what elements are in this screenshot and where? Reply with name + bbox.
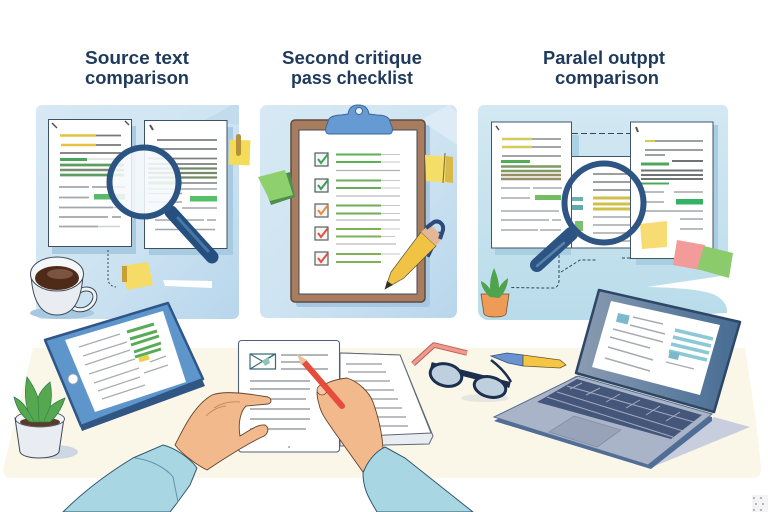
check item 3 <box>315 204 400 220</box>
document: left output <box>492 122 572 248</box>
pink straw <box>413 345 467 364</box>
main reviewed paper <box>238 340 340 452</box>
title: Parallel output comparison: Paralel outppt <box>543 48 665 68</box>
stack of papers <box>340 353 433 446</box>
document: right source <box>144 120 227 248</box>
potted plant: desk <box>14 377 78 459</box>
checklist paper <box>299 130 417 294</box>
panel: second critique checklist <box>258 105 457 318</box>
panel: parallel output comparison <box>478 105 733 320</box>
keyboard <box>537 379 702 439</box>
blank label strip <box>163 280 212 288</box>
clipboard board <box>291 120 425 302</box>
check item 5 <box>315 252 400 265</box>
glasses <box>428 360 511 402</box>
trackpad <box>549 416 621 447</box>
title: Second critique pass checklist <box>282 48 422 88</box>
check item 4 <box>315 227 400 244</box>
pink sticky note <box>673 240 705 270</box>
title: Source text comparison: comparison <box>85 68 189 88</box>
document: middle <box>571 156 632 248</box>
tablet <box>45 303 205 431</box>
title: Second critique pass checklist: pass checklist <box>291 68 413 88</box>
title: Parallel output comparison <box>543 48 665 88</box>
yellow sticky note <box>425 153 453 183</box>
laptop base <box>494 376 712 469</box>
corner noise mark <box>752 495 768 512</box>
dashed connector: top <box>572 132 630 134</box>
coffee cup <box>30 257 95 319</box>
laptop screen <box>576 290 740 412</box>
magnifier: right panel <box>537 164 644 266</box>
panel: source text comparison <box>30 105 250 319</box>
potted plant: panel <box>481 268 509 317</box>
laptop <box>494 290 750 469</box>
sticky note: right edge <box>229 134 250 165</box>
desk surface <box>3 348 761 478</box>
title: Parallel output comparison: comparison <box>555 68 659 88</box>
document: left source <box>48 120 132 246</box>
right hand and arm <box>317 378 473 512</box>
magnifier: left panel <box>110 148 212 257</box>
check item 2 <box>315 179 400 196</box>
green sticky note <box>258 170 295 205</box>
document: right output <box>630 122 713 258</box>
pen <box>385 221 443 289</box>
title: Source text comparison <box>85 48 189 88</box>
check item 1 <box>315 153 400 170</box>
title: Source text comparison: Source text <box>85 48 189 68</box>
red pencil <box>297 354 342 406</box>
marker pen <box>491 353 566 368</box>
clipboard clip <box>326 105 392 134</box>
left hand and arm <box>63 393 271 512</box>
dashed connector <box>108 250 116 287</box>
dashed connector: lower <box>510 255 630 288</box>
title: Second critique pass checklist: Second critique <box>282 48 422 68</box>
yellow sticky note <box>640 221 667 249</box>
sticky note: bottom <box>121 262 153 290</box>
green sticky note <box>697 246 733 278</box>
